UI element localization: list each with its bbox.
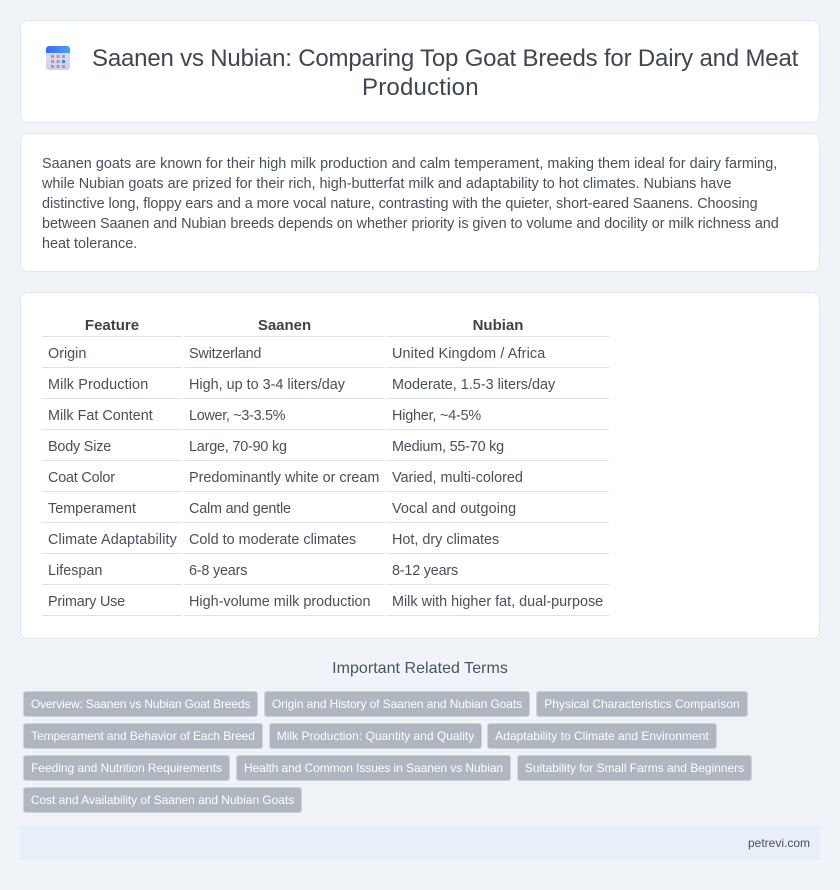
comparison table: United Kingdom / Africa bbox=[392, 346, 545, 362]
comparison table: Predominantly white or cream bbox=[189, 470, 379, 486]
tag: Temperament and Behavior of Each Breed bbox=[31, 729, 255, 743]
comparison table: Nubian bbox=[473, 317, 523, 334]
tag bbox=[23, 723, 263, 749]
title: Production bbox=[362, 74, 479, 101]
tag: Physical Characteristics Comparison bbox=[544, 697, 740, 711]
comparison table: Moderate, 1.5-3 liters/day bbox=[392, 377, 555, 393]
comparison table: Switzerland bbox=[189, 346, 261, 362]
comparison table: High, up to 3-4 liters/day bbox=[189, 377, 345, 393]
comparison table: Milk with higher fat, dual-purpose bbox=[392, 594, 603, 610]
comparison table: Lower, ~3-3.5% bbox=[189, 408, 285, 424]
tag bbox=[264, 691, 530, 717]
intro paragraph: distinctive long, floppy ears and a more vocal nature, contrasting with the quieter, short-eared Saanens. Choosing bbox=[42, 196, 758, 212]
tag bbox=[269, 723, 482, 749]
comparison table: Milk Fat Content bbox=[48, 408, 153, 424]
header panel bbox=[20, 20, 820, 123]
intro paragraph: while Nubian goats are prized for their rich, high-butterfat milk and adaptability to hot climates. Nubians have bbox=[42, 176, 732, 192]
footer source: petrevi.com bbox=[748, 836, 810, 850]
comparison table: Climate Adaptability bbox=[48, 532, 177, 548]
comparison table: Calm and gentle bbox=[189, 501, 291, 517]
comparison table: Temperament bbox=[48, 501, 136, 517]
intro paragraph: between Saanen and Nubian breeds depends on whether priority is given to volume and docility or milk richness and bbox=[42, 216, 779, 232]
comparison table: Cold to moderate climates bbox=[189, 532, 356, 548]
related terms heading: Important Related Terms bbox=[332, 660, 508, 677]
comparison table: Vocal and outgoing bbox=[392, 501, 516, 517]
comparison table: Higher, ~4-5% bbox=[392, 408, 481, 424]
comparison table: Primary Use bbox=[48, 594, 125, 610]
footer bar bbox=[20, 826, 820, 860]
tag: Cost and Availability of Saanen and Nubian Goats bbox=[31, 793, 294, 807]
comparison table: 8-12 years bbox=[392, 563, 458, 579]
intro paragraph bbox=[42, 156, 779, 252]
comparison table: 6-8 years bbox=[189, 563, 247, 579]
tag: Adaptability to Climate and Environment bbox=[495, 729, 709, 743]
intro paragraph: Saanen goats are known for their high milk production and calm temperament, making them ideal for dairy farming, bbox=[42, 156, 777, 172]
tag bbox=[536, 691, 748, 717]
comparison table: Large, 70-90 kg bbox=[189, 439, 287, 455]
icon: calendar bbox=[46, 46, 70, 70]
header: Feature: Feature bbox=[85, 317, 139, 334]
comparison table: Saanen bbox=[258, 317, 311, 334]
tag: Milk Production: Quantity and Quality bbox=[277, 729, 474, 743]
related term tags bbox=[23, 691, 752, 813]
title: Saanen vs Nubian: Comparing Top Goat Breeds for Dairy and Meat bbox=[92, 45, 798, 72]
comparison table: Coat Color bbox=[48, 470, 115, 486]
comparison table: High-volume milk production bbox=[189, 594, 371, 610]
comparison table: Varied, multi-colored bbox=[392, 470, 523, 486]
intro paragraph: heat tolerance. bbox=[42, 236, 137, 252]
tag bbox=[517, 755, 752, 781]
comparison table: Body Size bbox=[48, 439, 111, 455]
title bbox=[92, 45, 798, 101]
tag bbox=[487, 723, 717, 749]
comparison table: Lifespan bbox=[48, 563, 102, 579]
panel: intro text bbox=[20, 133, 820, 272]
tag: Health and Common Issues in Saanen vs Nubian bbox=[244, 761, 503, 775]
tag bbox=[23, 755, 230, 781]
tag bbox=[236, 755, 511, 781]
tag: Feeding and Nutrition Requirements bbox=[31, 761, 222, 775]
comparison table: Hot, dry climates bbox=[392, 532, 499, 548]
tag: Suitability for Small Farms and Beginners bbox=[525, 761, 744, 775]
tag bbox=[23, 691, 258, 717]
tag: Overview: Saanen vs Nubian Goat Breeds bbox=[31, 697, 250, 711]
panel: comparison table bbox=[20, 292, 820, 639]
comparison table: Medium, 55-70 kg bbox=[392, 439, 504, 455]
comparison table: Milk Production bbox=[48, 377, 148, 393]
comparison table bbox=[42, 317, 609, 616]
tag: Origin and History of Saanen and Nubian Goats bbox=[272, 697, 522, 711]
tag bbox=[23, 787, 302, 813]
comparison table: Origin bbox=[48, 346, 86, 362]
